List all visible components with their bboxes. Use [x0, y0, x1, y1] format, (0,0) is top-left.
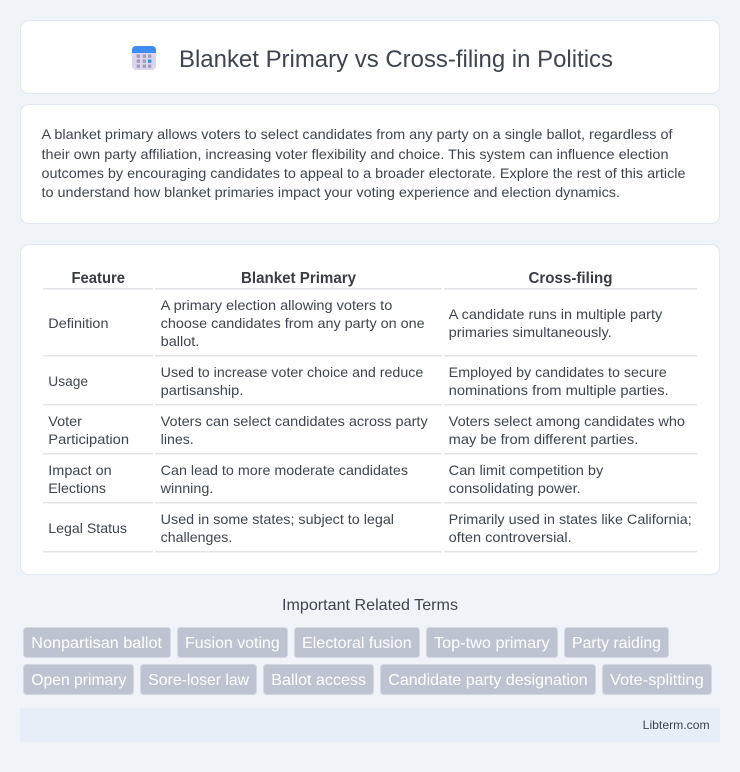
- tag: electoral fusion: Electoral fusion: [302, 635, 412, 652]
- panel: intro text: their own party affiliation, increasing voter flexibility and choice. This system can influence election: [42, 146, 668, 162]
- row: voter participation: may be from different parties.: [449, 431, 638, 447]
- tag: top-two primary: [426, 628, 558, 658]
- row: legal status: Legal Status: [48, 520, 127, 536]
- row: definition: Definition: [48, 315, 108, 331]
- tag: party raiding: [564, 628, 668, 658]
- tag: candidate party designation: Candidate party designation: [388, 672, 588, 689]
- tag: ballot access: [264, 664, 374, 694]
- tag: sore-loser law: [140, 664, 256, 694]
- row: impact on elections: winning.: [160, 480, 213, 496]
- row: voter participation: Participation: [48, 431, 129, 447]
- tag: ballot access: Ballot access: [271, 672, 366, 689]
- table header row: [43, 270, 697, 290]
- row: usage: nominations from multiple parties.: [449, 382, 669, 398]
- row: impact on elections: [43, 462, 697, 504]
- row: voter participation: lines.: [161, 431, 194, 447]
- row: definition: A primary election allowing voters to: [161, 297, 393, 313]
- row: legal status: Primarily used in states like California;: [449, 511, 692, 527]
- row: voter participation: Voter: [48, 413, 82, 429]
- row: definition: choose candidates from any party on one: [161, 315, 425, 331]
- table header row: Cross-filing: [528, 270, 612, 287]
- tag: open primary: [24, 664, 134, 694]
- row: definition: A candidate runs in multiple party: [449, 306, 662, 322]
- panel: intro text: to understand how blanket primaries impact your voting experience and election dynamics.: [42, 184, 620, 200]
- row: usage: partisanship.: [161, 382, 243, 398]
- tag: nonpartisan ballot: Nonpartisan ballot: [31, 635, 163, 652]
- panel: intro text: outcomes by encouraging candidates to appeal to a broader electorate. Explore the rest of this article: [42, 165, 686, 181]
- title: Blanket Primary vs Cross-filing in Politics: [179, 46, 613, 73]
- panel: header: [20, 20, 720, 94]
- row: impact on elections: Can lead to more moderate candidates: [161, 462, 408, 478]
- row: definition: [43, 297, 697, 356]
- row: usage: [43, 364, 697, 406]
- tag: vote-splitting: [602, 664, 712, 694]
- related term tags: [24, 628, 712, 694]
- row: legal status: [43, 511, 697, 552]
- heading: important related terms: Important Related Terms: [282, 597, 458, 614]
- tag: sore-loser law: Sore-loser law: [148, 672, 249, 689]
- row: voter participation: Voters select among candidates who: [449, 413, 685, 429]
- row: legal status: often controversial.: [449, 529, 572, 545]
- row: legal status: challenges.: [161, 529, 232, 545]
- tag: candidate party designation: [380, 664, 596, 694]
- row: usage: Usage: [48, 373, 88, 389]
- table header row: Feature: [72, 270, 125, 287]
- row: impact on elections: Elections: [48, 480, 106, 496]
- tag: fusion voting: Fusion voting: [185, 635, 280, 652]
- row: impact on elections: consolidating power.: [449, 480, 581, 496]
- tag: vote-splitting: Vote-splitting: [610, 672, 704, 689]
- tag: open primary: Open primary: [31, 672, 126, 689]
- panel: comparison table: [20, 244, 720, 574]
- row: voter participation: Voters can select candidates across party: [161, 413, 428, 429]
- tag: party raiding: Party raiding: [572, 635, 661, 652]
- footer bar: [20, 708, 720, 742]
- row: definition: primaries simultaneously.: [449, 324, 612, 340]
- row: impact on elections: Can limit competition by: [449, 462, 603, 478]
- panel: intro text: A blanket primary allows voters to select candidates from any party on a single ballot, regardless of: [42, 126, 673, 142]
- row: definition: ballot.: [161, 333, 199, 349]
- footer credit: Libterm.com: [643, 718, 710, 732]
- row: usage: Employed by candidates to secure: [449, 364, 667, 380]
- row: impact on elections: Impact on: [48, 462, 112, 478]
- tag: fusion voting: [178, 628, 288, 658]
- row: voter participation: [43, 413, 697, 454]
- table header row: Blanket Primary: [241, 270, 356, 287]
- row: legal status: Used in some states; subject to legal: [161, 511, 394, 527]
- tag: top-two primary: Top-two primary: [434, 635, 550, 652]
- panel: intro text: [20, 104, 720, 224]
- tag: nonpartisan ballot: [24, 628, 170, 658]
- tag: electoral fusion: [294, 628, 420, 658]
- icon: calendar: [132, 46, 156, 70]
- row: usage: Used to increase voter choice and reduce: [161, 364, 424, 380]
